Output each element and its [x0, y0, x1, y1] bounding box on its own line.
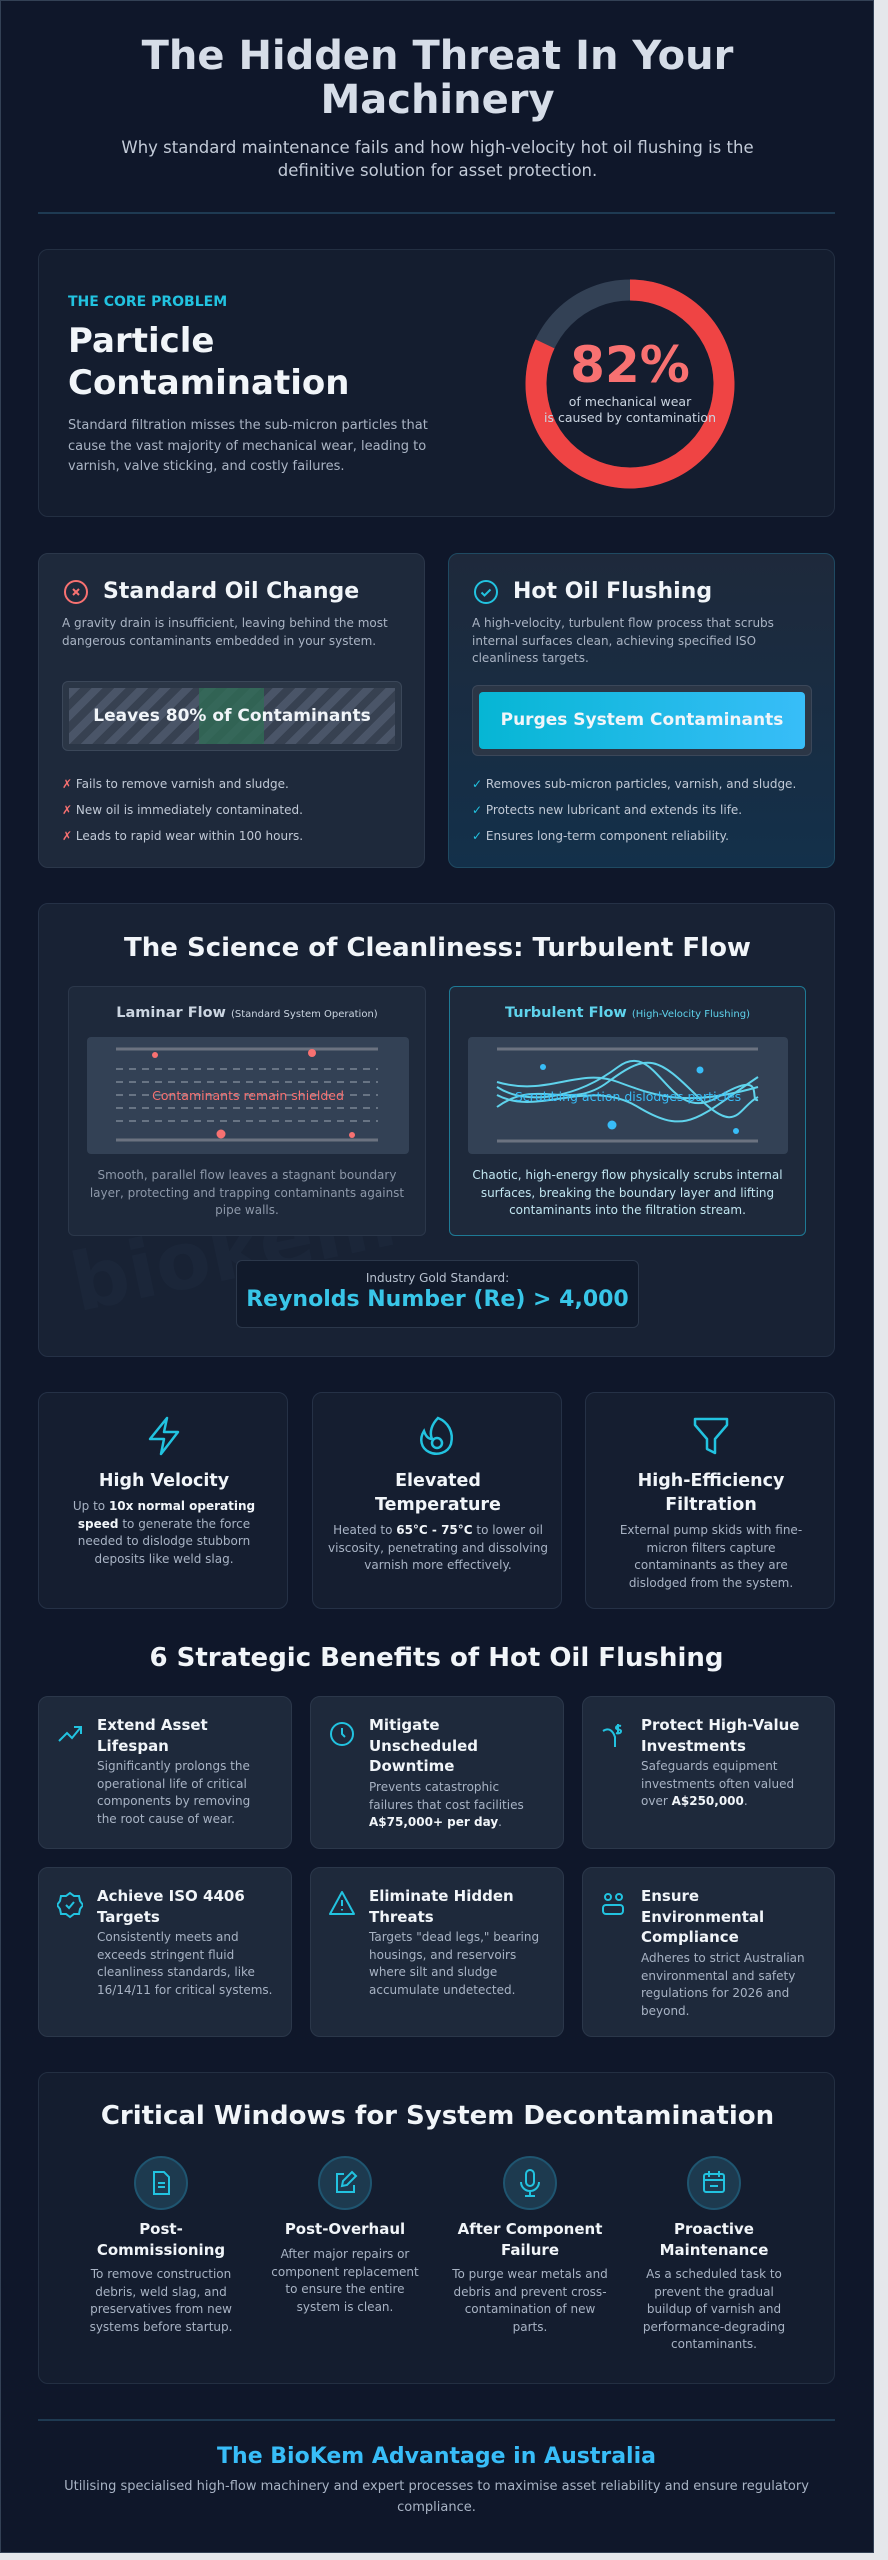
card: laminar flow [68, 986, 426, 1236]
feature card: high velocity: High Velocity [99, 1471, 229, 1491]
watermark: biokem [63, 1171, 403, 1330]
icon: flame [420, 1416, 453, 1455]
feature card: elevated temperature [312, 1392, 562, 1609]
benefit: hidden threats: Eliminate Hidden Threats [369, 1887, 514, 1926]
benefit: protect investments [582, 1696, 835, 1849]
heading: 6 strategic benefits: 6 Strategic Benefits of Hot Oil Flushing [149, 1643, 724, 1673]
benefit: mitigate downtime [310, 1696, 564, 1849]
step: post-overhaul [271, 2156, 419, 2314]
heading: particle contamination [68, 321, 349, 403]
feature card: filtration: High-Efficiency [638, 1471, 784, 1491]
list: benefits: ✓ Removes sub-micron particles, varnish, and sludge. [472, 777, 796, 791]
card: turbulent flow: Turbulent Flow (High-Velocity Flushing) [505, 1005, 750, 1021]
text: A high-velocity, turbulent flow process that scrubs internal surfaces clean, achieving specified ISO cleanliness targets. [472, 616, 774, 665]
bar: leaves 80%: Leaves 80% of Contaminants [93, 706, 371, 726]
diagram: laminar: Contaminants remain shielded [152, 1088, 344, 1103]
feature card: high velocity: Up to 10x normal operating speed to generate the force needed to dislodge stubborn deposits like weld slag. [73, 1499, 255, 1566]
list: failures: ✗ Fails to remove varnish and sludge. [62, 777, 289, 791]
benefit: mitigate downtime: Prevents catastrophic failures that cost facilities A$75,000+ per day. [369, 1780, 524, 1829]
text: A gravity drain is insufficient, leaving behind the most dangerous contaminants embedded in your system. [62, 616, 388, 648]
subtitle: Why standard maintenance fails and how high-velocity hot oil flushing is the definitive solution for asset protection. [121, 138, 754, 180]
footer text: Utilising specialised high-flow machinery and expert processes to maximise asset reliability and ensure regulatory compliance. [64, 2479, 809, 2514]
card: turbulent flow: Chaotic, high-energy flow physically scrubs internal surfaces, breaking the boundary layer and lifting contaminants into the filtration stream. [472, 1168, 783, 1217]
panel: critical windows: After major repairs or component replacement to ensure the entire system is clean. [271, 2247, 419, 2314]
feature card: elevated temperature: Temperature [375, 1495, 501, 1515]
feature card: filtration [585, 1392, 835, 1609]
text: core problem description: Standard filtration misses the sub-micron particles that cause the vast majority of mechanical wear, leading to varnish, valve sticking, and costly failures. [68, 418, 428, 474]
benefit: environmental compliance: Ensure Environmental Compliance [641, 1887, 764, 1946]
panel: hot oil flushing [448, 553, 835, 868]
title: The Hidden Threat In Your [142, 33, 733, 79]
list: benefits [472, 777, 796, 843]
benefit: iso 4406: Achieve ISO 4406 Targets [97, 1887, 245, 1926]
icon: lightning [148, 1416, 180, 1456]
feature card: filtration: External pump skids with fine-micron filters capture contaminants as they are dislodged from the system. [620, 1523, 802, 1590]
callout: reynolds number [236, 1260, 639, 1328]
heading: Critical Windows for System Decontamination [101, 2101, 774, 2131]
benefit: iso 4406 [38, 1867, 292, 2037]
benefit: hidden threats: Targets "dead legs," bearing housings, and reservoirs where silt and sludge accumulate undetected. [369, 1930, 539, 1996]
heading: Hot Oil Flushing [513, 579, 712, 604]
feature card: elevated temperature: Elevated [395, 1471, 481, 1491]
heading: Standard Oil Change [103, 579, 359, 604]
benefit: protect investments: Safeguards equipment investments often valued over A$250,000. [641, 1759, 794, 1808]
label: the core problem: THE CORE PROBLEM [68, 294, 227, 310]
step: proactive maintenance [643, 2156, 785, 2351]
callout: reynolds number: Industry Gold Standard: [366, 1271, 509, 1285]
card: laminar flow: Laminar Flow (Standard System Operation) [116, 1005, 378, 1021]
panel: standard oil change [38, 553, 425, 868]
feature card: filtration: Filtration [665, 1495, 757, 1515]
benefit: extend asset lifespan: Extend Asset Lifespan [97, 1716, 208, 1754]
heading: The Science of Cleanliness: Turbulent Flow [124, 933, 751, 963]
panel: critical windows: After Component [458, 2220, 602, 2238]
bar: purges: Purges System Contaminants [501, 710, 783, 730]
benefit: environmental compliance [582, 1867, 835, 2037]
callout: reynolds number: Reynolds Number (Re) > 4,000 [246, 1287, 629, 1312]
list: failures: ✗ New oil is immediately contaminated. [62, 803, 303, 817]
diagram: laminar [87, 1037, 409, 1154]
donut chart: 82% [526, 280, 734, 488]
list: failures: ✗ Leads to rapid wear within 100 hours. [62, 829, 303, 843]
card: turbulent flow [449, 986, 806, 1236]
donut chart: 82%: of mechanical wear [569, 394, 691, 409]
benefit: extend asset lifespan [38, 1696, 292, 1849]
panel: critical windows [38, 2072, 835, 2384]
step: post-commissioning [90, 2156, 232, 2334]
benefit: protect investments: Protect High-Value Investments [641, 1716, 799, 1754]
heading: particle contamination: Particle [68, 321, 214, 361]
donut chart: 82%: is caused by contamination [544, 410, 716, 425]
icon: x circle [64, 580, 88, 604]
footer heading: The BioKem Advantage in Australia [217, 2444, 656, 2469]
benefit: mitigate downtime: Mitigate Unscheduled Downtime [369, 1716, 478, 1775]
list: benefits: ✓ Protects new lubricant and extends its life. [472, 803, 742, 817]
diagram: turbulent: Scrubbing action dislodges particles [515, 1089, 741, 1104]
heading: particle contamination: Contamination [68, 363, 349, 403]
title [142, 33, 734, 123]
panel: critical windows: Post-Overhaul [285, 2220, 405, 2238]
step: after component failure [452, 2156, 608, 2334]
panel: science of cleanliness [38, 903, 835, 1357]
panel: critical windows: Commissioning [97, 2241, 225, 2259]
panel: critical windows: To purge wear metals and debris and prevent cross-contamination of new parts. [452, 2267, 608, 2334]
bar: leaves 80% [62, 681, 402, 751]
bar: purges [472, 685, 812, 756]
icon: check circle [474, 580, 498, 604]
panel: critical windows: To remove construction debris, weld slag, and preservatives from new systems before startup. [90, 2267, 232, 2334]
title: Machinery [320, 77, 555, 123]
benefit: environmental compliance: Adheres to strict Australian environmental and safety regulations for 2026 and beyond. [641, 1951, 805, 2018]
list: failures [62, 777, 303, 843]
list: benefits: ✓ Ensures long-term component reliability. [472, 829, 729, 843]
panel: critical windows: Maintenance [660, 2241, 768, 2259]
card: laminar flow: Smooth, parallel flow leaves a stagnant boundary layer, protecting and trapping contaminants against pipe walls. [90, 1168, 404, 1217]
benefit: iso 4406: Consistently meets and exceeds stringent fluid cleanliness standards, like 16/14/11 for critical systems. [97, 1930, 272, 1996]
panel: critical windows: Failure [501, 2241, 559, 2259]
feature card: elevated temperature: Heated to 65°C - 75°C to lower oil viscosity, penetrating and dissolving varnish more effectively. [328, 1523, 548, 1572]
panel: core problem [38, 249, 835, 517]
icon: filter [694, 1418, 728, 1454]
benefit: hidden threats [310, 1867, 564, 2037]
diagram: turbulent [468, 1037, 788, 1154]
donut chart: 82%: 82% [570, 336, 690, 394]
panel: critical windows: Post- [139, 2220, 183, 2238]
panel: critical windows: Proactive [674, 2220, 754, 2238]
feature card: high velocity [38, 1392, 288, 1609]
benefit: extend asset lifespan: Significantly prolongs the operational life of critical components by removing the root cause of wear. [97, 1759, 250, 1826]
panel: critical windows: As a scheduled task to prevent the gradual buildup of varnish and performance-degrading contaminants. [643, 2267, 785, 2351]
